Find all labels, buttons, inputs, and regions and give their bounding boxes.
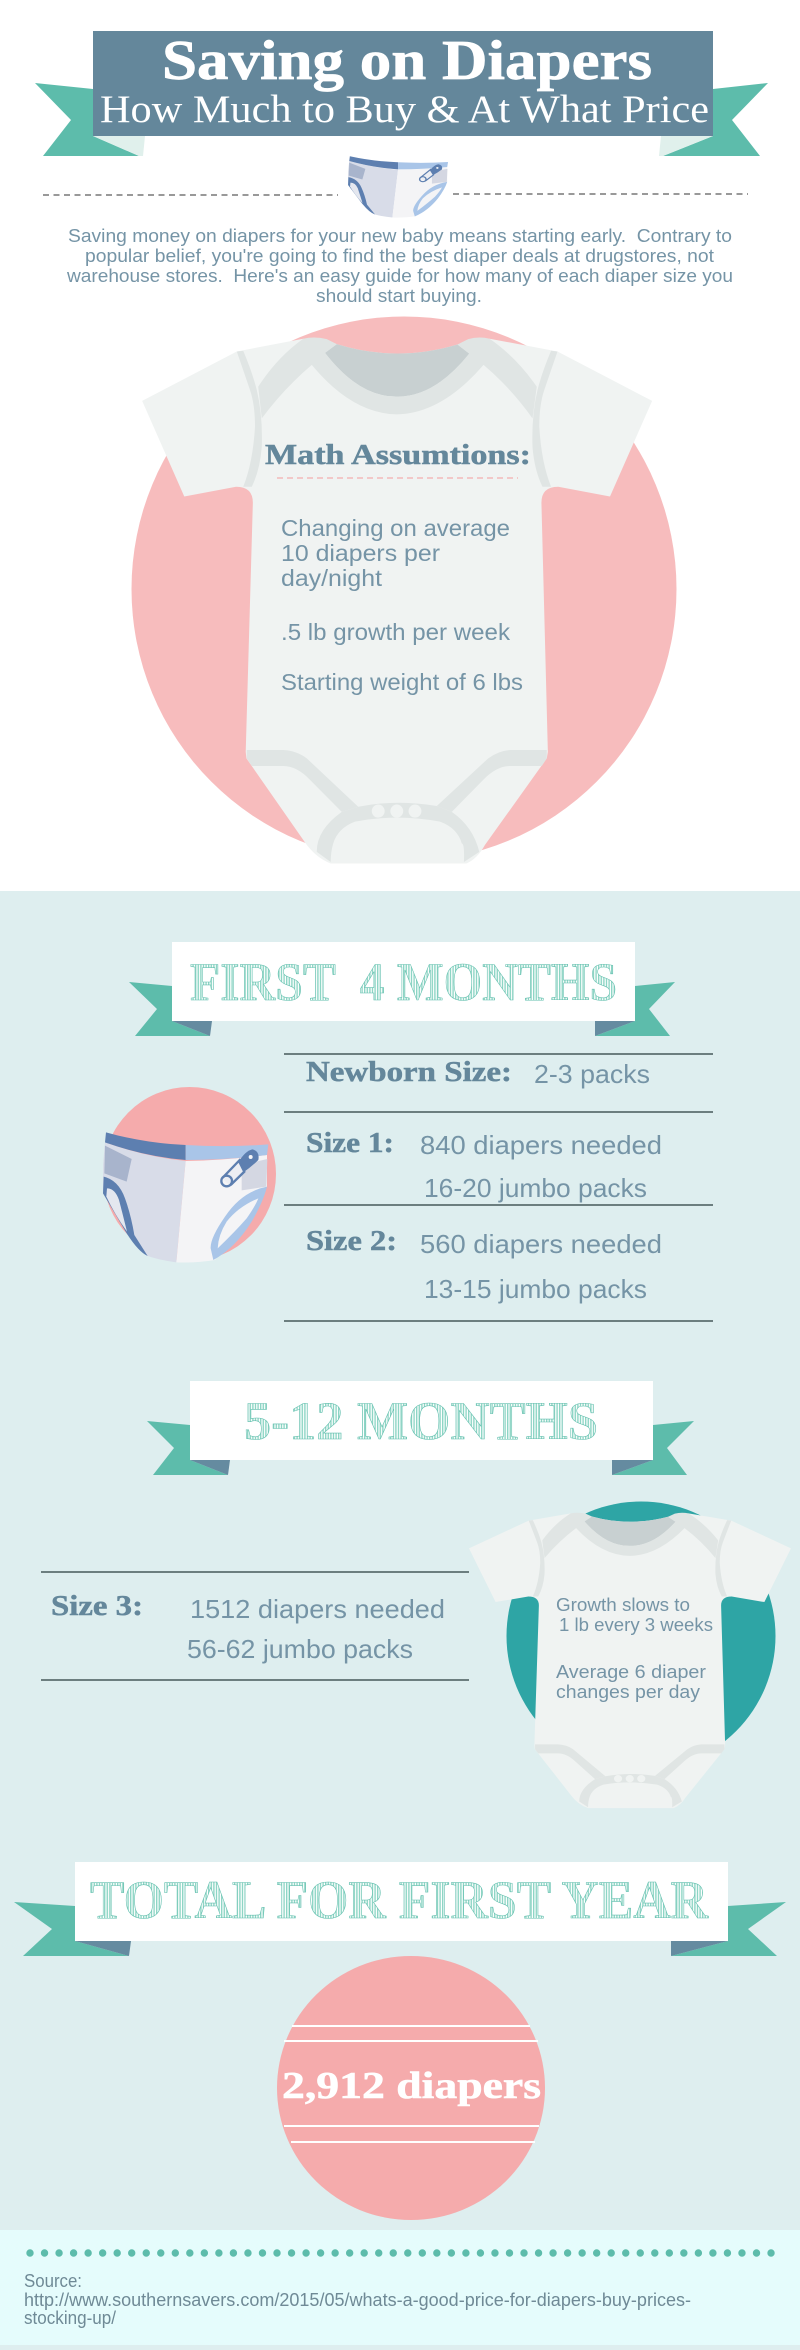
math assumptions heading: Math Assumtions: [265, 439, 531, 471]
subtitle: How Much to Buy & At What Price [100, 88, 709, 131]
size 2 row: Size 2: [306, 1225, 397, 1257]
newborn size row [306, 1056, 650, 1089]
newborn size row: 2-3 packs [534, 1059, 650, 1089]
size 2 row [306, 1225, 662, 1304]
section banner [129, 942, 675, 1036]
panel: total for first year [14, 1862, 786, 2220]
assumptions list: .5 lb growth per week [281, 619, 511, 645]
panel: 5-12 months [41, 1381, 791, 1808]
table rules [41, 1572, 469, 1680]
icon: onesie [142, 338, 652, 863]
onesie notes [556, 1595, 713, 1702]
size 3 row [51, 1590, 445, 1664]
newborn size row: Newborn Size: [306, 1056, 512, 1088]
onesie notes: 1 lb every 3 weeks [559, 1615, 713, 1635]
title: Saving on Diapers [162, 30, 652, 92]
assumptions list: Starting weight of 6 lbs [281, 669, 523, 695]
size 1 row: 840 diapers needed [420, 1130, 662, 1160]
divider right [453, 193, 748, 195]
panel: footer source [0, 2230, 800, 2345]
size 1 row [306, 1127, 662, 1203]
table rules [284, 1054, 713, 1321]
size 2 row: 560 diapers needed [420, 1229, 662, 1259]
math assumptions graphic [132, 316, 676, 863]
assumptions list [281, 515, 523, 695]
divider left [43, 194, 338, 196]
section banner [14, 1862, 786, 1956]
section heading: FIRST 4 MONTHS [190, 952, 617, 1012]
right ribbon tail [659, 83, 768, 156]
source text: stocking-up/ [24, 2308, 116, 2328]
size 3 row: 1512 diapers needed [190, 1594, 445, 1624]
light teal section background [0, 891, 800, 2350]
section heading: 5-12 MONTHS [244, 1391, 598, 1451]
assumptions list: 10 diapers per [281, 540, 440, 566]
size 3 row: 56-62 jumbo packs [187, 1634, 413, 1664]
left ribbon tail [35, 83, 145, 156]
onesie notes: changes per day [556, 1682, 700, 1702]
source text: http://www.southernsavers.com/2015/05/whats-a-good-price-for-diapers-buy-prices- [24, 2290, 691, 2310]
panel: first 4 months [103, 942, 713, 1321]
total circle [277, 1956, 545, 2220]
size 1 row: 16-20 jumbo packs [424, 1173, 647, 1203]
intro paragraph: Saving money on diapers for your new baby means starting early. Contrary to [68, 226, 732, 246]
size 3 row: Size 3: [51, 1590, 143, 1622]
source text [24, 2271, 691, 2328]
teal circle [506, 1502, 776, 1770]
intro paragraph [66, 226, 733, 306]
total figure: 2,912 diapers [282, 2065, 541, 2107]
source text: Source: [24, 2271, 82, 2291]
intro paragraph: warehouse stores. Here's an easy guide for how many of each diaper size you [66, 266, 733, 286]
intro paragraph: popular belief, you're going to find the best diaper deals at drugstores, not [85, 246, 714, 266]
assumptions list: day/night [281, 565, 383, 591]
onesie notes: Average 6 diaper [556, 1662, 706, 1682]
assumptions list: Changing on average [281, 515, 510, 541]
icon: diaper large [103, 1132, 268, 1263]
section banner [147, 1381, 694, 1475]
title panel [93, 31, 713, 136]
size 1 row: Size 1: [306, 1127, 394, 1159]
section heading: TOTAL FOR FIRST YEAR [90, 1870, 709, 1930]
pink circle behind diaper [103, 1087, 276, 1261]
header banner [35, 30, 768, 156]
pink circle [132, 316, 676, 862]
onesie notes: Growth slows to [556, 1595, 690, 1615]
icon: onesie small [469, 1513, 791, 1808]
intro paragraph: should start buying. [316, 286, 482, 306]
size 2 row: 13-15 jumbo packs [424, 1274, 647, 1304]
icon: diaper [348, 156, 448, 218]
